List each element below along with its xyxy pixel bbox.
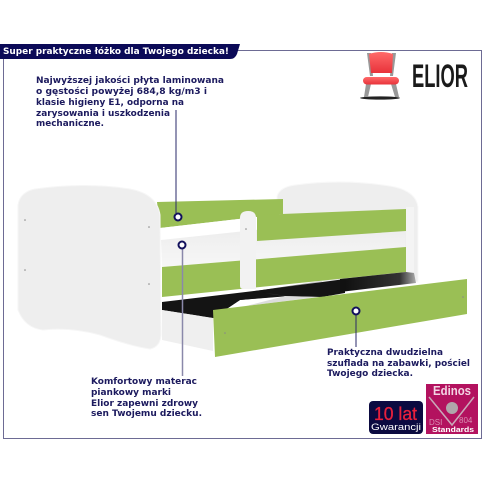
text: drawer: szuflada na zabawki, pościel	[327, 358, 470, 369]
text: board quality: Najwyższej jakości płyta laminowana	[36, 75, 224, 86]
text: board quality: klasie higieny E1, odporna na	[36, 98, 184, 108]
callout: mattress	[178, 242, 186, 376]
lower green side rail	[162, 247, 406, 297]
callout: drawer	[352, 308, 360, 347]
text: mattress: piankowy marki	[91, 388, 171, 398]
badge: 10 year warranty: Gwarancji	[371, 422, 421, 433]
drawer interior black	[162, 272, 416, 318]
logo: Elior	[360, 52, 468, 100]
text: drawer	[327, 348, 470, 379]
header banner: Super praktyczne łóżko dla Twojego dziecka!	[3, 46, 229, 57]
icon: red chair	[360, 52, 400, 100]
text: mattress	[91, 377, 202, 419]
white guard post	[240, 211, 256, 289]
text: mattress: Elior zapewni zdrowy	[91, 399, 198, 409]
text: mattress: sen Twojemu dziecku.	[91, 409, 202, 419]
text: drawer: Praktyczna dwudzielna	[327, 348, 443, 358]
mattress	[161, 214, 405, 267]
badge: Edinos standards	[426, 384, 478, 434]
text: board quality: o gęstości powyżej 684,8 kg/m3 i	[36, 86, 207, 97]
upper guard rail	[257, 209, 406, 241]
text: board quality	[36, 75, 224, 129]
text: board quality: mechaniczne.	[36, 119, 104, 129]
badge: Edinos standards: DSI	[429, 418, 442, 427]
white base under the bed	[162, 310, 213, 351]
right headboard	[277, 182, 418, 282]
badge: 10 year warranty: 10 lat	[374, 404, 417, 424]
text: board quality: zarysowania i uszkodzenia	[36, 109, 170, 119]
drawer front	[213, 279, 467, 357]
right end post	[406, 207, 414, 272]
text: drawer: Twojego dziecka.	[327, 369, 413, 379]
back green panel	[157, 199, 283, 228]
header banner	[0, 44, 240, 59]
frame	[4, 50, 482, 438]
badge: Edinos standards: Standards	[432, 425, 474, 434]
badge: Edinos standards: Edinos	[433, 384, 471, 398]
badge: Edinos standards: 804	[459, 416, 473, 425]
callout: board	[174, 110, 182, 220]
left headboard	[18, 186, 161, 349]
white strip under back panel	[160, 214, 283, 240]
bed illustration	[18, 182, 467, 357]
text: mattress: Komfortowy materac	[91, 377, 197, 387]
badge: 10 year warranty	[369, 401, 423, 434]
